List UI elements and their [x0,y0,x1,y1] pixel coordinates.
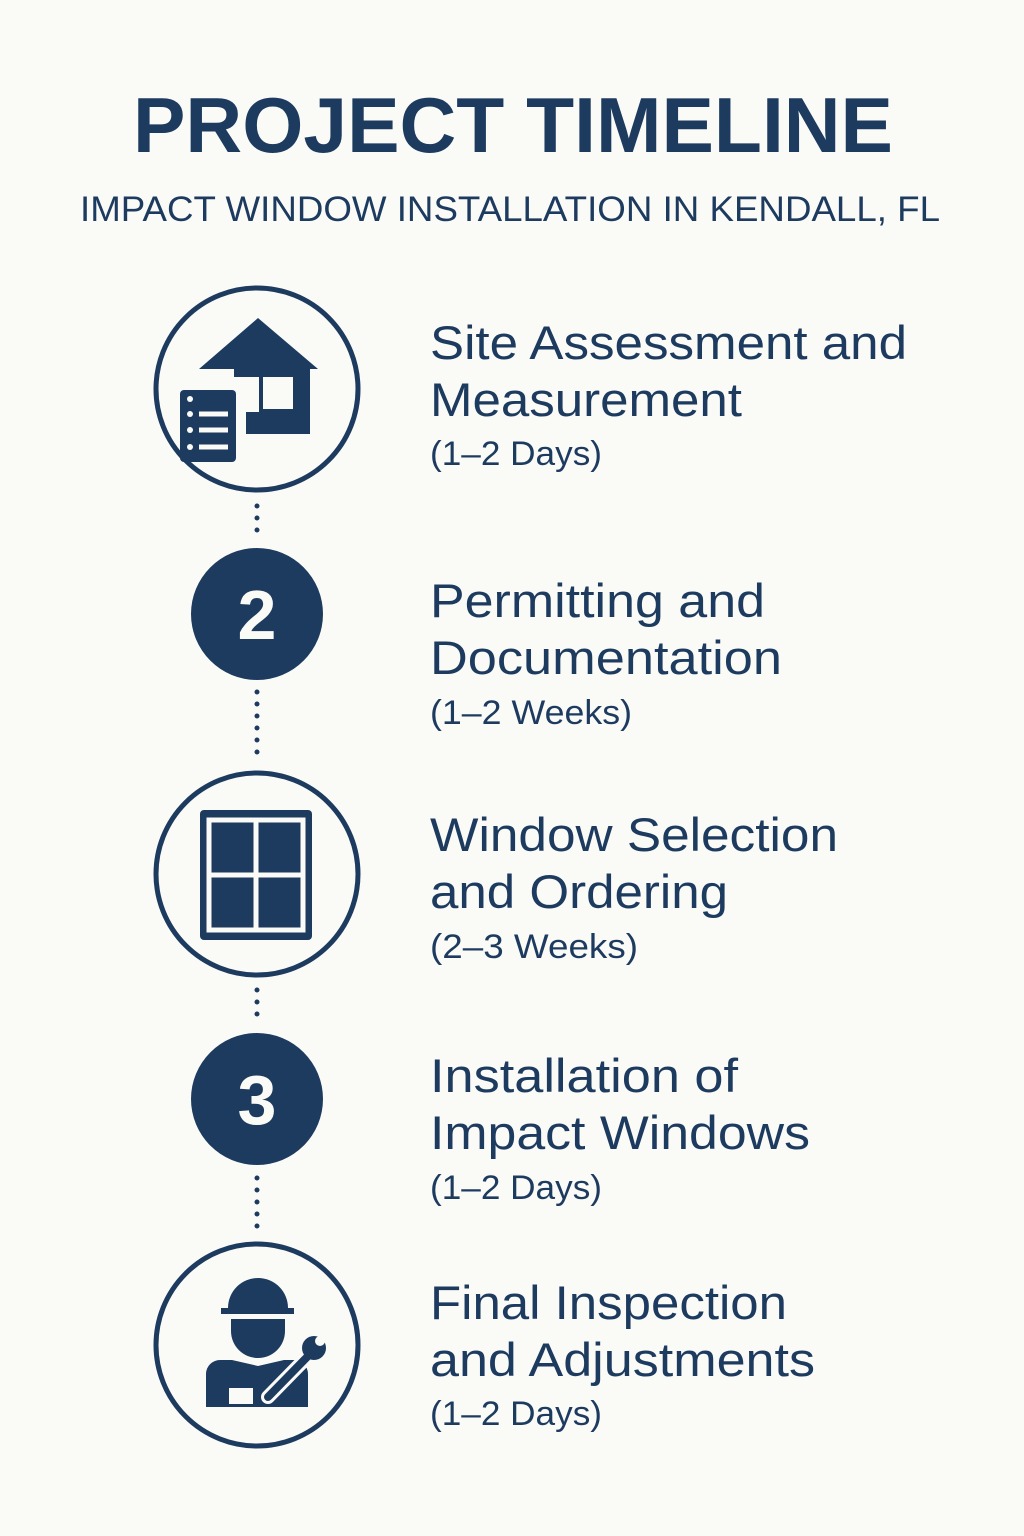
step 4 badge [191,1033,323,1165]
step 3 icon: window [156,773,358,975]
step 4 badge: 3 [238,1061,276,1139]
step 3 text: and Ordering [430,865,728,918]
step 2 text: (1–2 Weeks) [430,694,632,732]
step 4 text: (1–2 Days) [430,1169,602,1207]
step 4 text: Installation of [430,1049,739,1102]
step 5 text: and Adjustments [430,1333,815,1386]
connector dots [254,506,260,1230]
step 1 text: Measurement [430,373,742,426]
step 5 text: (1–2 Days) [430,1395,602,1433]
step 1 text: (1–2 Days) [430,435,602,473]
step 2 text: Permitting and [430,574,765,627]
step 1 text [430,316,907,473]
step 3 text: (2–3 Weeks) [430,928,638,966]
step 5 text: Final Inspection [430,1276,787,1329]
step 2 badge: 2 [238,576,276,654]
title: PROJECT TIMELINE [133,81,893,169]
step 1 icon: house with checklist [156,288,358,490]
step 3 text [430,808,838,966]
step 2 badge [191,548,323,680]
subtitle: IMPACT WINDOW INSTALLATION IN KENDALL, FL [80,190,940,229]
step 2 text: Documentation [430,631,782,684]
step 5 text [430,1276,815,1433]
step 1 text: Site Assessment and [430,316,907,369]
step 3 text: Window Selection [430,808,838,861]
step 2 text [430,574,782,732]
step 4 text [430,1049,810,1207]
step 5 icon: worker with wrench [156,1244,358,1446]
step 4 text: Impact Windows [430,1106,810,1159]
